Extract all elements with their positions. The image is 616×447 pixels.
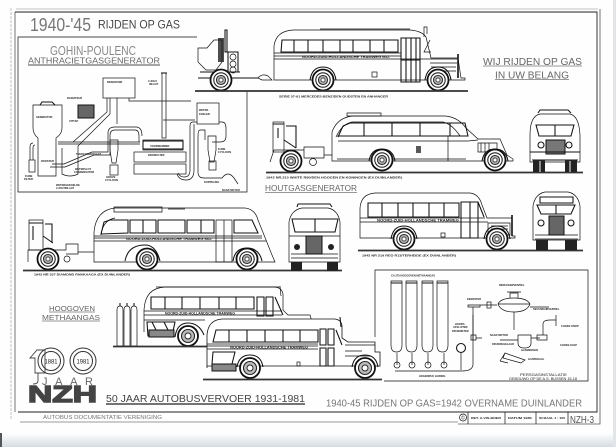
right pipework xyxy=(177,122,238,184)
panel: persgasinstallatie diagram xyxy=(375,270,588,381)
title block: © xyxy=(461,414,465,422)
front view: Diamond xyxy=(289,204,340,271)
front view: Reo xyxy=(533,192,580,250)
heading: 50 jaar autobusvervoer: 50 JAAR AUTOBUSVERVOER 1931-1981 xyxy=(106,394,305,405)
bus 3: Diamond with wood gas trailer: NOORD-ZUID-HOLLANDSCHE TRAMWEG MIJ. xyxy=(126,237,212,241)
association name: AUTOBUS DOCUMENTATIE VERENIGING xyxy=(43,415,162,421)
fine cyclone xyxy=(208,136,231,170)
water cooler: WATER- xyxy=(199,108,209,112)
generator vessel xyxy=(33,102,62,176)
door xyxy=(461,202,484,238)
diagram labels: WATERSLOT xyxy=(75,167,92,171)
title block: DATUM 1981 xyxy=(508,416,533,420)
title block: NZH-3 xyxy=(570,414,594,426)
fine cyclone: CYCLOON xyxy=(218,150,231,154)
generator vessel: GENERATOR xyxy=(36,115,52,119)
diagram labels: TEERCONDENSAAT xyxy=(76,152,101,156)
fine filter: FILTER xyxy=(24,177,33,181)
heading: anthracietgasgenerator: ANTHRACIETGASGENERATOR xyxy=(28,56,160,66)
hood xyxy=(424,40,457,71)
gas mixer and pedal xyxy=(500,315,556,363)
reservoir tank: RESERVOIR xyxy=(107,80,122,84)
bus 1: Mercedes-Benz with anthracite trailer xyxy=(195,27,468,98)
bus 6: methane bus front: NOORD-ZUID-HOLLANDSCHE TRAMWEG xyxy=(230,345,308,349)
grof cycloon: CYCLOON xyxy=(105,178,118,182)
cylinder and pipe labels: HOGEDRUK LEIDING xyxy=(419,374,445,378)
diagram labels: WATERGEKOELDE xyxy=(56,183,80,187)
title xyxy=(30,15,180,35)
bus 5: methane bus rear xyxy=(113,286,313,346)
reducing valve xyxy=(468,292,549,340)
installation caption xyxy=(509,372,578,381)
pressure gauge xyxy=(456,344,466,370)
heading: hoogoven methaangas: HOOGOVEN xyxy=(49,304,95,313)
front view: White xyxy=(530,110,580,172)
windows xyxy=(368,203,459,217)
bus line lettering: NOORD-ZUID-HOLLANDSCHE TRAMWEG MIJ. xyxy=(302,55,390,59)
coolers: BRONFILTER xyxy=(148,153,165,157)
slogan xyxy=(483,57,582,82)
title block xyxy=(460,412,594,426)
cylinder and pipe labels xyxy=(391,274,481,378)
valve labels: CHOKE KNOP xyxy=(561,324,579,328)
heading: overname Duinlander: 1940-45 RIJDEN OP GAS=1942 OVERNAME DUINLANDER xyxy=(326,398,582,410)
bus 4: Reo xyxy=(358,193,583,258)
caption: 1942 NR 219 REO R13/TERHEIDE (EX DUINLANDER) xyxy=(362,254,456,258)
caption: SERIE 57-61 MERCEDES-BENZ/DEN OUDSTEN EN ANHANGER xyxy=(279,94,388,98)
logo: 100 jaar NZH: 1881 xyxy=(44,358,58,366)
windows xyxy=(281,40,398,52)
fine filter xyxy=(24,160,35,181)
radiator: UITTAP xyxy=(69,119,78,123)
valve labels: CHOKE KLEP xyxy=(560,343,577,347)
bus 3: Diamond with wood gas trailer xyxy=(23,207,342,276)
grof cycloon xyxy=(105,140,118,182)
panel: anthraciet gas generator diagram xyxy=(18,37,247,192)
cylinder and pipe labels: AFSLUITER xyxy=(453,325,468,329)
water cooler: KOELER xyxy=(199,112,210,116)
diagram labels: CONDENSATOR xyxy=(74,170,94,174)
gas trailer xyxy=(198,30,272,80)
title: RIJDEN OP GAS xyxy=(98,20,180,32)
windows xyxy=(101,220,258,234)
cylinder and pipe labels: HOOFD- xyxy=(455,322,465,326)
diagram labels: NAAR MOTOR xyxy=(222,188,240,192)
reservoir tank xyxy=(103,78,135,98)
heading: hoogoven methaangas: METHAANGAS xyxy=(42,313,100,322)
valve labels: REDUCEERVENTIEL xyxy=(499,283,525,287)
air inlet chimney xyxy=(148,73,167,138)
cylinder and pipe labels: KEERSTER xyxy=(467,297,481,301)
title block: RET. A.VIS-BOER xyxy=(471,416,501,420)
fine filter: FIJNE xyxy=(25,174,33,178)
valve labels: NAAR MOTOR xyxy=(490,333,508,337)
coolers: VOORWARMER xyxy=(150,144,170,148)
methane cylinders on ground xyxy=(117,303,137,346)
valve labels: SECUNDAIRVENTIEL xyxy=(533,307,560,311)
heading: hoogoven methaangas xyxy=(42,304,100,322)
air inlet chimney: LUCHT- xyxy=(148,79,158,83)
heading: Gohin-Poulenc: GOHIN-POULENC xyxy=(50,43,136,58)
four gas cylinders xyxy=(391,281,473,371)
door xyxy=(216,220,232,262)
bus 6: methane bus front xyxy=(203,317,382,380)
valve labels: GASPEDAAL xyxy=(528,357,545,361)
title: 1940-'45 xyxy=(30,15,91,35)
caption: 1942 NR.215 WHITE R90/DEN HOOGEN EN KONINGEN (EX DUINLANDER) xyxy=(266,176,402,180)
coolers xyxy=(134,140,186,174)
logo: 100 jaar NZH: NZH xyxy=(28,381,97,407)
cylinder and pipe labels: CA 270 HOOGOVEN METHAANGAS xyxy=(391,274,435,278)
bus 4: Reo: NOORD-ZUID-HOLLANDSCHE TRAMWEG xyxy=(377,218,459,222)
radiator xyxy=(67,96,94,123)
diagram labels xyxy=(56,152,240,192)
diagram labels: LUCHTINLAAT xyxy=(56,186,75,190)
installation caption: GEBOUWD OP DE A.S. BUSSEN 15-18 xyxy=(509,376,578,381)
slogan: IN UW BELANG xyxy=(495,70,569,82)
slogan: WIJ RIJDEN OP GAS xyxy=(483,57,582,68)
radiator: RADIATEUR xyxy=(67,96,82,100)
title block: SCHAAL 1 : 100 xyxy=(539,416,566,420)
logo: 100 jaar NZH xyxy=(28,348,97,407)
logo: 100 jaar NZH: 1981 xyxy=(76,358,90,366)
logo: 100 jaar NZH: JAAR xyxy=(42,376,93,388)
installation caption: PERSGASINSTALLATIE xyxy=(520,372,567,377)
valve labels: GASMENGER xyxy=(521,348,538,352)
windows xyxy=(213,330,318,342)
cylinder and pipe labels: DRUKMETER xyxy=(452,329,469,333)
windows xyxy=(151,297,254,309)
water cooler xyxy=(197,103,219,124)
air inlet chimney: INLAAT xyxy=(149,82,159,86)
bus 5: methane bus rear: NOORD-ZUID-HOLLANDSCHE TRAMWEG xyxy=(165,311,235,315)
gas pipes xyxy=(30,98,195,176)
valve labels xyxy=(490,283,579,361)
door xyxy=(401,38,420,82)
windows xyxy=(338,123,468,137)
generator vessel: ROOSTER xyxy=(41,159,54,163)
heading: houtgasgenerator: HOUTGASGENERATOR xyxy=(265,184,357,193)
valve labels: DRUKREGELAAR xyxy=(492,342,514,346)
grof cycloon: GROVE xyxy=(106,175,116,179)
caption: 1943 NR 337 DIAMOND R90/KAAGA (EX DUINLANDER) xyxy=(34,272,130,276)
wood gas trailer xyxy=(270,122,332,166)
diagram labels: KOPPELING xyxy=(204,180,219,184)
fine cyclone: FIJNE xyxy=(218,147,226,151)
bus 2: White with wood gas trailer xyxy=(266,113,583,180)
